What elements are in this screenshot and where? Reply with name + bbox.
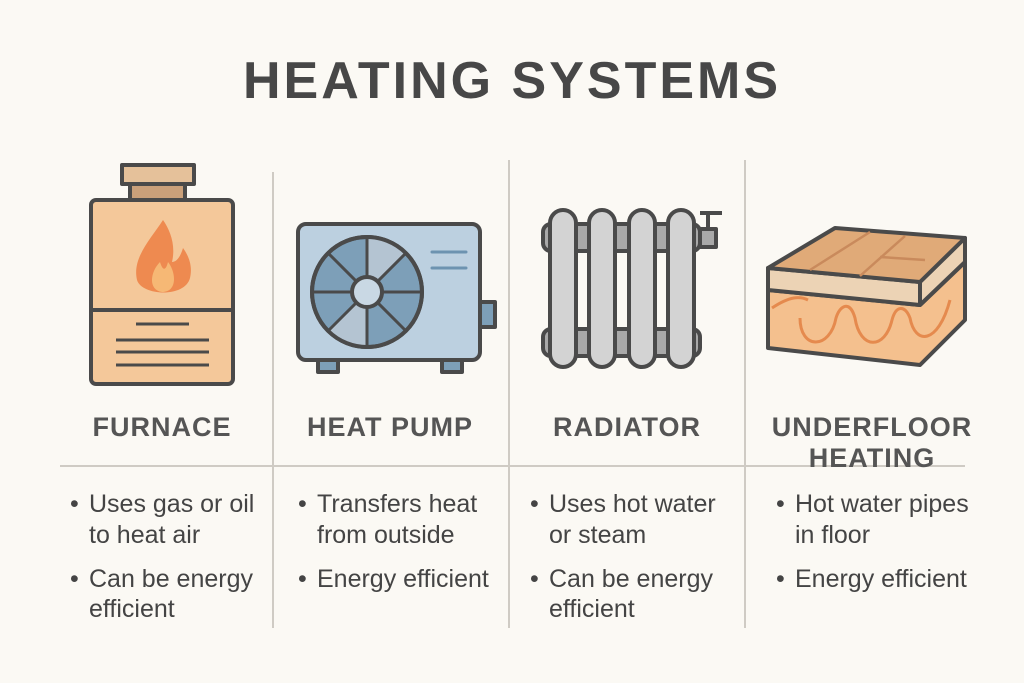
bullets: Energy efficient (317, 565, 489, 593)
bullets (70, 490, 969, 623)
headings: HEATING (809, 443, 935, 473)
bullets: from outside (317, 521, 455, 549)
icon: underfloor (768, 228, 965, 365)
bullets: Can be energy (549, 565, 714, 593)
icon: radiator (543, 210, 722, 367)
bullets: Hot water pipes (795, 490, 969, 518)
title: HEATING SYSTEMS (243, 52, 781, 110)
headings: UNDERFLOOR (772, 412, 972, 442)
bullets: efficient (89, 595, 175, 623)
icon: furnace (91, 165, 233, 384)
bullets: Uses hot water (549, 490, 716, 518)
headings: RADIATOR (553, 412, 701, 442)
bullets: Can be energy (89, 565, 254, 593)
bullets: • (298, 565, 307, 593)
bullets: • (70, 490, 79, 518)
bullets: Transfers heat (317, 490, 477, 518)
bullets: in floor (795, 521, 870, 549)
bullets: • (298, 490, 307, 518)
icon: heat pump (298, 224, 495, 372)
bullets: Uses gas or oil (89, 490, 254, 518)
bullets: or steam (549, 521, 646, 549)
headings: FURNACE (92, 412, 232, 442)
headings: HEAT PUMP (307, 412, 473, 442)
bullets: Energy efficient (795, 565, 967, 593)
bullets: to heat air (89, 521, 200, 549)
bullets: • (530, 565, 539, 593)
bullets: • (776, 490, 785, 518)
bullets: • (70, 565, 79, 593)
bullets: efficient (549, 595, 635, 623)
headings (92, 412, 972, 473)
bullets: • (530, 490, 539, 518)
bullets: • (776, 565, 785, 593)
